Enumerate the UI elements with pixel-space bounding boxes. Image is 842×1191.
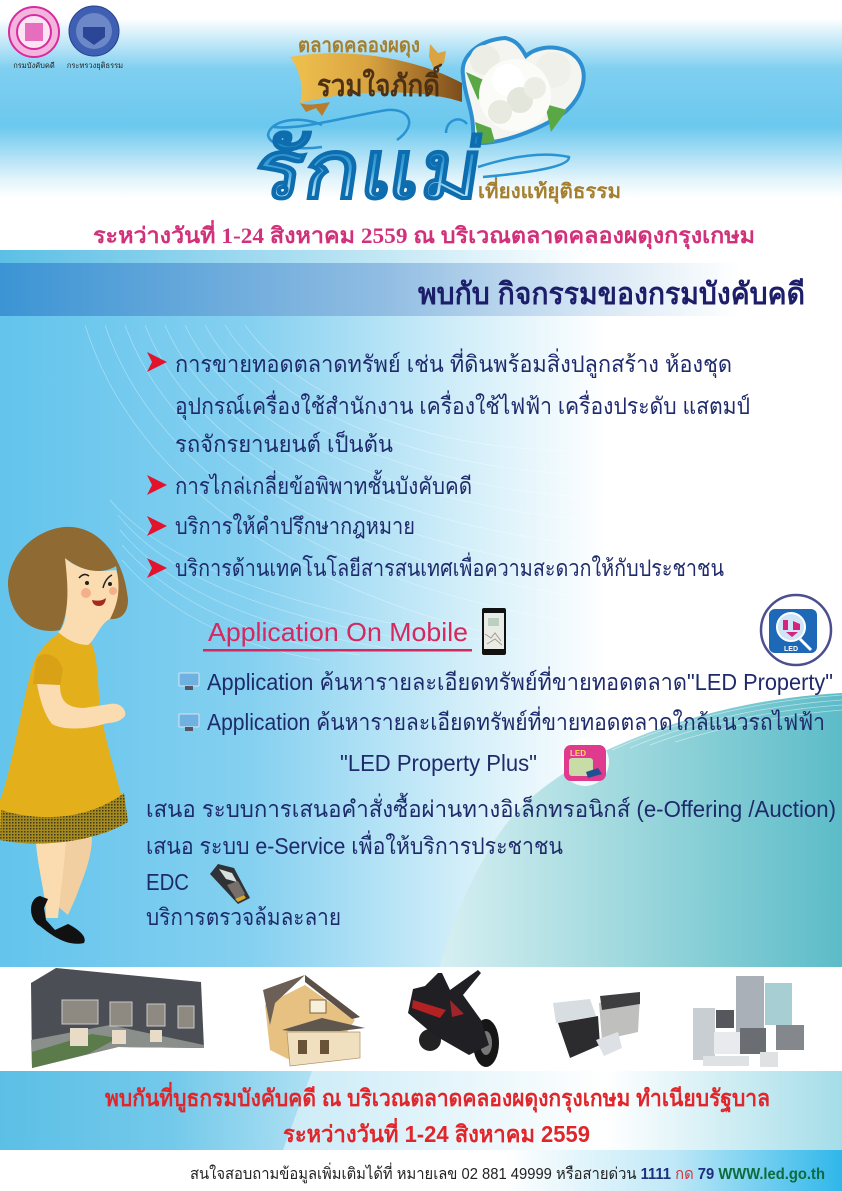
activity: mediation: การไกล่เกลี่ยข้อพิพาทชั้นบังคับคดี — [175, 470, 472, 499]
services list — [146, 793, 836, 930]
eyes and mouth — [79, 574, 117, 606]
icon: EDC card terminal — [210, 864, 250, 904]
application item 2 continued: "LED Property Plus" — [340, 750, 537, 776]
front leg — [36, 840, 66, 918]
photo: townhouses — [31, 968, 204, 1068]
bullet arrow — [147, 558, 167, 578]
big title รักแม่: รักแม่ — [248, 124, 489, 216]
sleeve shade — [33, 654, 63, 686]
photo strip — [0, 967, 842, 1071]
application item 2 — [179, 706, 825, 735]
gold ribbon: รวมใจภักดิ์ — [317, 63, 443, 103]
date and place line: ระหว่างวันที่ 1-24 สิงหาคม 2559 ณ บริเวณตลาดคลองผดุงกรุงเกษม — [93, 219, 755, 250]
logo: ministry of justice seal — [67, 6, 123, 70]
footer: contact — [0, 1150, 842, 1191]
logo: department of legal execution seal: กรมบังคับคดี — [13, 61, 55, 70]
dress hem — [0, 793, 128, 843]
subtitle: เที่ยงแท้ยุติธรรม — [478, 176, 621, 204]
service: e-offering: เสนอ ระบบการเสนอคำสั่งซื้อผ่านทางอิเล็กทรอนิกส์ (e-Offering /Auction) — [146, 793, 836, 822]
banner: heading: พบกับ กิจกรรมของกรมบังคับคดี — [418, 278, 805, 311]
icon: LED Property app: LED — [784, 646, 798, 653]
auction line 3: รถจักรยานยนต์ เป็นต้น — [175, 429, 393, 457]
logo: ministry of justice seal: กระทรวงยุติธรรม — [67, 61, 123, 70]
icon: LED Property Plus app — [561, 738, 609, 786]
activity: legal advice: บริการให้คำปรึกษากฎหมาย — [175, 513, 415, 539]
neck and face — [58, 558, 120, 645]
footer: contact: สนใจสอบถามข้อมูลเพิ่มเติมได้ที่ หมายเลข 02 881 49999 หรือสายด่วน 1111 กด 79 WWW.led.go.th — [190, 1162, 825, 1184]
service: bankruptcy check: บริการตรวจล้มละลาย — [146, 904, 341, 930]
bottom panel: event location — [0, 1071, 842, 1150]
photo: motorcycle — [408, 970, 499, 1067]
blue swashes — [268, 110, 569, 177]
icon: LED Property app — [761, 595, 831, 665]
banner: heading — [0, 263, 842, 316]
photo: wooden house — [263, 975, 365, 1066]
icon: monitor — [179, 714, 199, 731]
character: girl — [0, 527, 128, 944]
gold ribbon: ตลาดคลองผดุง — [298, 35, 420, 58]
service: EDC: EDC — [146, 869, 189, 895]
photo: office equipment — [553, 992, 640, 1058]
bullet arrow — [147, 516, 167, 536]
bullet arrow — [147, 475, 167, 495]
shoes — [31, 896, 85, 944]
activity: auction: การขายทอดตลาดทรัพย์ เช่น ที่ดินพร้อมสิ่งปลูกสร้าง ห้องชุด — [175, 348, 732, 378]
logo: department of legal execution seal — [9, 7, 59, 70]
activity: IT services: บริการด้านเทคโนโลยีสารสนเทศเพื่อความสะดวกให้กับประชาชน — [175, 552, 724, 581]
activities list — [147, 348, 750, 581]
heart with flowers — [463, 38, 584, 144]
service: e-service: เสนอ ระบบ e-Service เพื่อให้บริการประชาชน — [146, 830, 563, 859]
back leg — [56, 836, 92, 915]
icon: monitor — [179, 673, 199, 690]
date line: ระหว่างวันที่ 1-24 สิงหาคม 2559 — [283, 1117, 590, 1147]
arm — [37, 684, 125, 728]
icon: smartphone — [482, 608, 506, 655]
dress — [0, 632, 128, 843]
auction line 2: อุปกรณ์เครื่องใช้สำนักงาน เครื่องใช้ไฟฟ้า เครื่องประดับ แสตมป์ — [175, 390, 750, 420]
hair — [8, 527, 128, 631]
event logo: รวมใจภักดิ์ รักแม่ — [248, 35, 621, 216]
application heading: Application On Mobile — [208, 617, 468, 647]
application item 1 — [179, 666, 833, 695]
gold ribbon — [290, 35, 462, 116]
icon: LED Property Plus app: LED — [570, 749, 586, 758]
bullet arrow — [147, 352, 167, 372]
photo: electrical appliances — [693, 976, 804, 1067]
location line: พบกันที่บูธกรมบังคับคดี ณ บริเวณตลาดคลองผดุงกรุงเกษม ทำเนียบรัฐบาล — [105, 1081, 770, 1113]
